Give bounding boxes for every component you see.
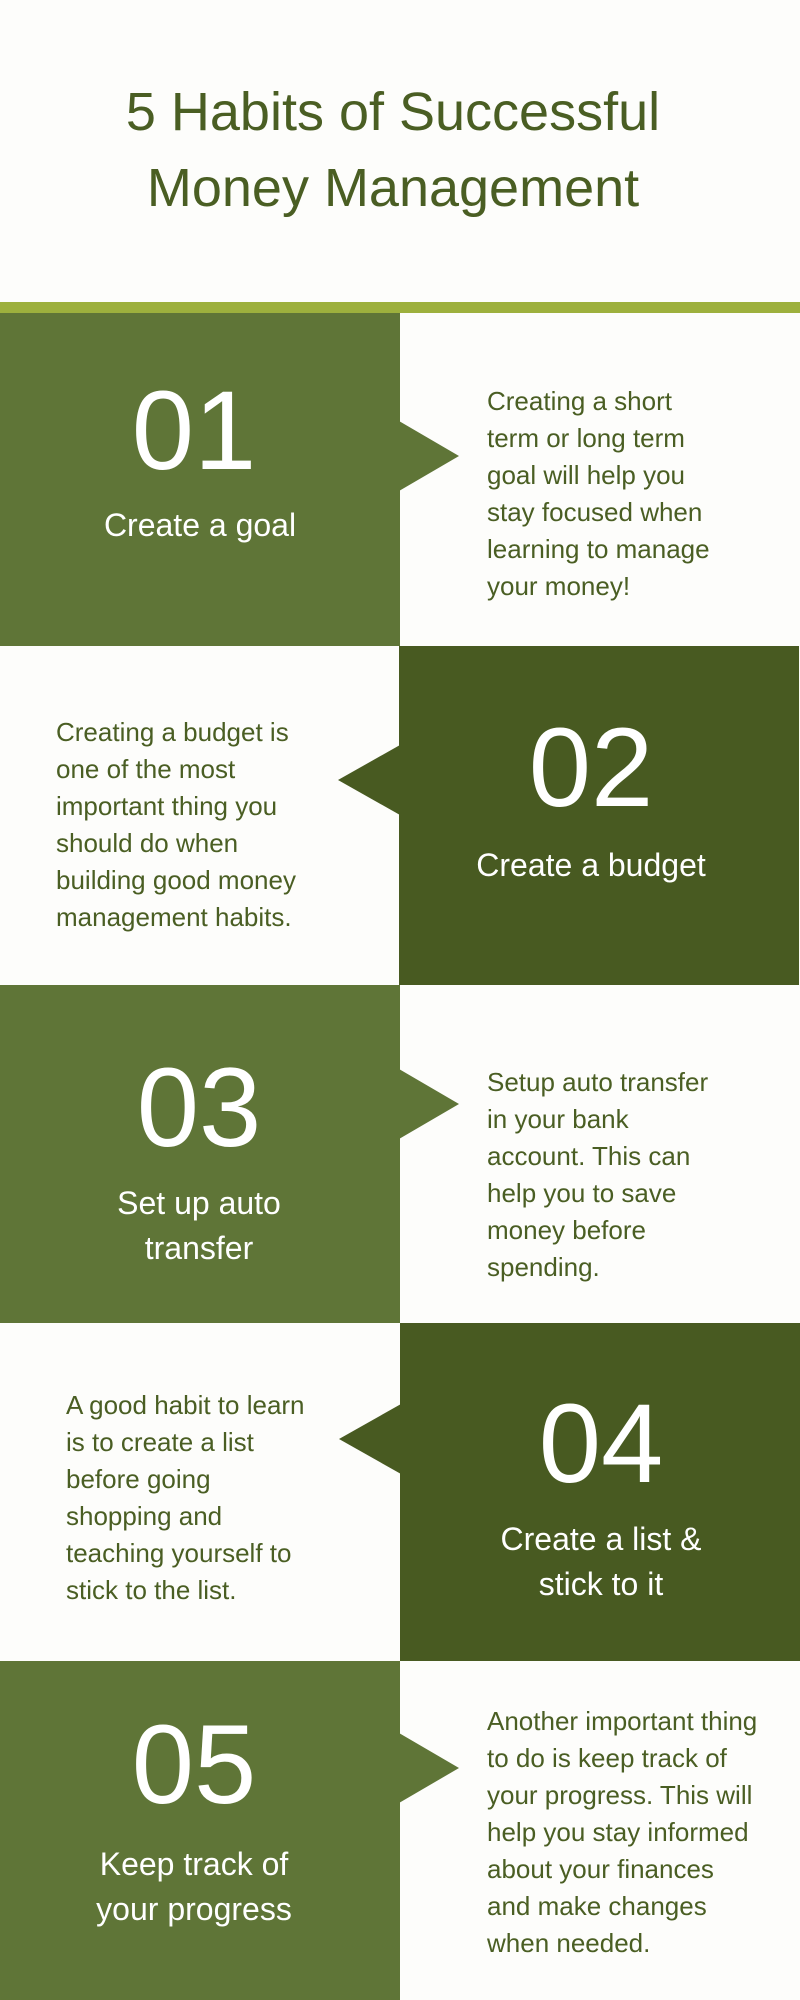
description 05: and make changes xyxy=(487,1891,707,1921)
accent stripe xyxy=(0,302,800,313)
panel: habit 02 xyxy=(56,646,799,985)
description 04: stick to the list. xyxy=(66,1575,236,1605)
arrow 05 xyxy=(400,1734,459,1802)
description 04: shopping and xyxy=(66,1501,222,1531)
label 02: Create a budget xyxy=(476,847,706,883)
description 05: about your finances xyxy=(487,1854,714,1884)
description 05: to do is keep track of xyxy=(487,1743,727,1773)
description 05: help you stay informed xyxy=(487,1817,749,1847)
description 01: stay focused when xyxy=(487,497,702,527)
title: Money Management xyxy=(147,158,639,218)
description 02: Creating a budget is xyxy=(56,717,289,747)
description 01: term or long term xyxy=(487,423,685,453)
label 04: Create a list & xyxy=(501,1521,701,1557)
description 01: goal will help you xyxy=(487,460,685,490)
description 04: is to create a list xyxy=(66,1427,254,1457)
number 05: 05 xyxy=(132,1702,256,1827)
description 01: your money! xyxy=(487,571,630,601)
arrow 01 xyxy=(400,422,459,490)
arrow 04 xyxy=(339,1404,400,1474)
label 03: Set up auto xyxy=(117,1185,281,1221)
description 03: money before xyxy=(487,1215,646,1245)
description 05: Another important thing xyxy=(487,1706,757,1736)
panel: habit 03 xyxy=(0,985,708,1323)
title xyxy=(126,82,660,218)
description 01: learning to manage xyxy=(487,534,710,564)
label 01: Create a goal xyxy=(104,507,296,543)
description 02: building good money xyxy=(56,865,296,895)
arrow 03 xyxy=(400,1070,459,1138)
description 04: teaching yourself to xyxy=(66,1538,291,1568)
description 02 xyxy=(56,717,296,932)
number 02: 02 xyxy=(529,705,653,830)
description 04 xyxy=(66,1390,305,1605)
arrow 02 xyxy=(338,746,399,814)
label 05 xyxy=(96,1846,292,1927)
description 02: one of the most xyxy=(56,754,235,784)
number block 04 xyxy=(400,1323,800,1661)
number 01: 01 xyxy=(132,368,256,493)
number block 01 xyxy=(0,313,400,646)
number block 05 xyxy=(0,1661,400,2000)
label 03 xyxy=(117,1185,281,1266)
description 04: A good habit to learn xyxy=(66,1390,305,1420)
description 05: your progress. This will xyxy=(487,1780,752,1810)
description 01: Creating a short xyxy=(487,386,672,416)
panel: habit 04 xyxy=(66,1323,800,1661)
number block 02 xyxy=(399,646,799,985)
description 05: when needed. xyxy=(487,1928,650,1958)
description 02: management habits. xyxy=(56,902,292,932)
description 03: in your bank xyxy=(487,1104,629,1134)
number 04: 04 xyxy=(539,1381,663,1506)
number 03: 03 xyxy=(137,1045,261,1170)
description 05 xyxy=(487,1706,757,1958)
panel: habit 05 xyxy=(0,1661,757,2000)
label 05: your progress xyxy=(96,1891,292,1927)
description 02: should do when xyxy=(56,828,238,858)
description 03: spending. xyxy=(487,1252,600,1282)
number block 03 xyxy=(0,985,400,1323)
description 02: important thing you xyxy=(56,791,277,821)
description 01 xyxy=(487,386,710,601)
title: 5 Habits of Successful xyxy=(126,82,660,142)
label 05: Keep track of xyxy=(100,1846,288,1882)
panel: habit 01 xyxy=(0,313,710,646)
label 04 xyxy=(501,1521,701,1602)
description 03 xyxy=(487,1067,708,1282)
description 03: Setup auto transfer xyxy=(487,1067,708,1097)
description 03: help you to save xyxy=(487,1178,676,1208)
label 04: stick to it xyxy=(539,1566,663,1602)
description 04: before going xyxy=(66,1464,211,1494)
description 03: account. This can xyxy=(487,1141,690,1171)
label 03: transfer xyxy=(145,1230,253,1266)
